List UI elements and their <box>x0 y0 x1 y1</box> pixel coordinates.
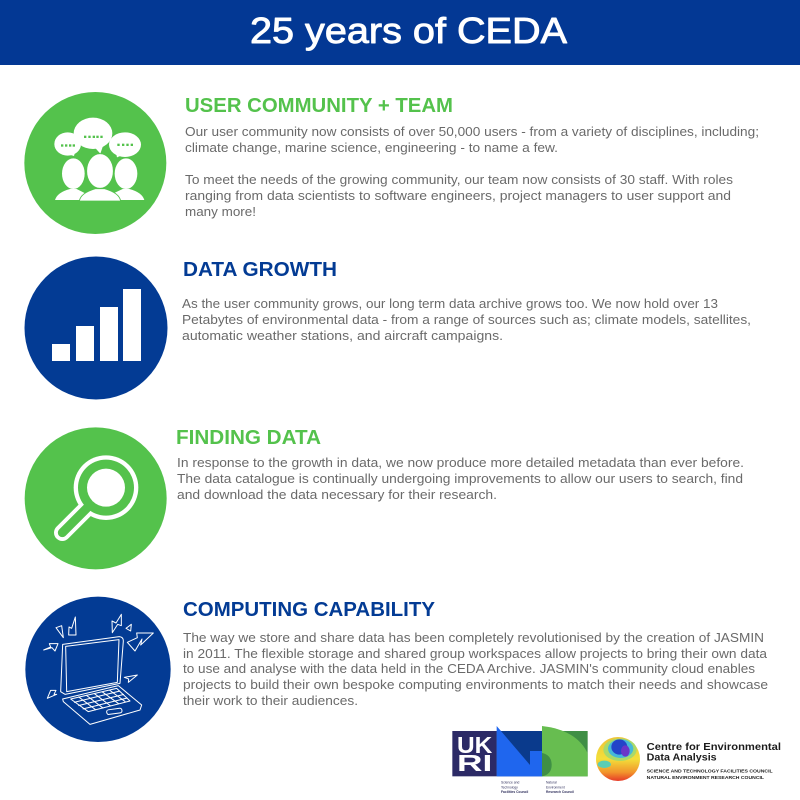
text block: user community: climate change, marine science, engineering - to name a few. <box>185 140 558 155</box>
icon: people talking <box>24 92 166 234</box>
text: Centre for Environmental Data Analysis <box>647 742 781 780</box>
heading: computing capability: COMPUTING CAPABILITY <box>183 599 436 621</box>
logo: Natural Environment Research Council: Environment <box>546 785 565 789</box>
text block: finding data: The data catalogue is continually undergoing improvements to allow our users to search, find <box>177 471 743 486</box>
text block: user community: ranging from data scientists to software engineers, project managers to user support and <box>185 188 731 203</box>
panel: finding data <box>25 427 744 569</box>
logos <box>452 726 781 794</box>
text block: finding data <box>177 455 744 502</box>
panel: data growth <box>24 256 751 400</box>
text block: finding data: In response to the growth in data, we now produce more detailed metadata than ever before. <box>177 455 744 470</box>
panel: computing capability <box>25 597 768 742</box>
text block: computing capability <box>183 630 768 708</box>
text: Centre for Environmental Data Analysis: NATURAL ENVIRONMENT RESEARCH COUNCIL <box>647 775 764 780</box>
heading: user community: USER COMMUNITY + TEAM <box>185 95 453 117</box>
logo: Natural Environment Research Council <box>542 726 588 794</box>
text block: computing capability: in 2011. The flexible storage and shared group workspaces allow projects to bring their own data <box>183 646 768 661</box>
text: Centre for Environmental Data Analysis: SCIENCE AND TECHNOLOGY FACILITIES COUNCIL <box>647 769 773 774</box>
logo: Science and Technology Facilities Council: Facilities Council <box>501 790 528 794</box>
logo: Science and Technology Facilities Council <box>497 726 542 794</box>
text block: data growth: Petabytes of environmental data - from a range of sources such as; climate models, satellites, <box>182 312 751 327</box>
header banner <box>0 0 800 65</box>
text block: user community: To meet the needs of the growing community, our team now consists of 30 staff. With roles <box>185 172 734 187</box>
icon: laptop with sparks <box>25 597 171 742</box>
icon: magnifying glass <box>25 427 167 569</box>
text: Centre for Environmental Data Analysis: Centre for Environmental <box>647 742 781 753</box>
logo: UKRI: RI <box>457 750 492 776</box>
text block: user community <box>185 124 759 219</box>
text block: computing capability: projects to build their own bespoke computing environments to match their needs and showcase <box>183 677 768 692</box>
logo: UKRI <box>452 731 497 776</box>
icon: bar chart <box>24 256 168 400</box>
text block: data growth <box>182 296 751 343</box>
logo: Natural Environment Research Council: Research Council <box>546 790 574 794</box>
text block: user community: many more! <box>185 204 256 219</box>
text block: data growth: As the user community grows, our long term data archive grows too. We now hold over 13 <box>182 296 718 311</box>
text block: computing capability: to use and analyse with the data held in the CEDA Archive. JASMIN's community cloud enables <box>183 661 756 676</box>
text block: computing capability: The way we store and share data has been completely revolutionised by the creation of JASMIN <box>183 630 764 645</box>
panel: user community and team <box>24 92 759 234</box>
text block: data growth: automatic weather stations, and aircraft campaigns. <box>182 328 503 343</box>
text block: user community: Our user community now consists of over 50,000 users - from a variety of disciplines, including; <box>185 124 759 139</box>
heading: finding data: FINDING DATA <box>176 427 321 449</box>
logo: Science and Technology Facilities Council: Science and <box>501 781 519 785</box>
title: 25 years of CEDA <box>250 10 567 51</box>
logo: Natural Environment Research Council: Natural <box>546 781 557 785</box>
text block: finding data: and download the data necessary for their research. <box>177 487 497 502</box>
logo: CEDA globe <box>596 737 640 781</box>
logo: Science and Technology Facilities Council: Technology <box>501 785 518 789</box>
heading: data growth: DATA GROWTH <box>183 259 337 281</box>
text block: computing capability: their work to their audiences. <box>183 693 358 708</box>
logo: UKRI: UK <box>457 732 492 758</box>
text: Centre for Environmental Data Analysis: Data Analysis <box>647 753 717 764</box>
